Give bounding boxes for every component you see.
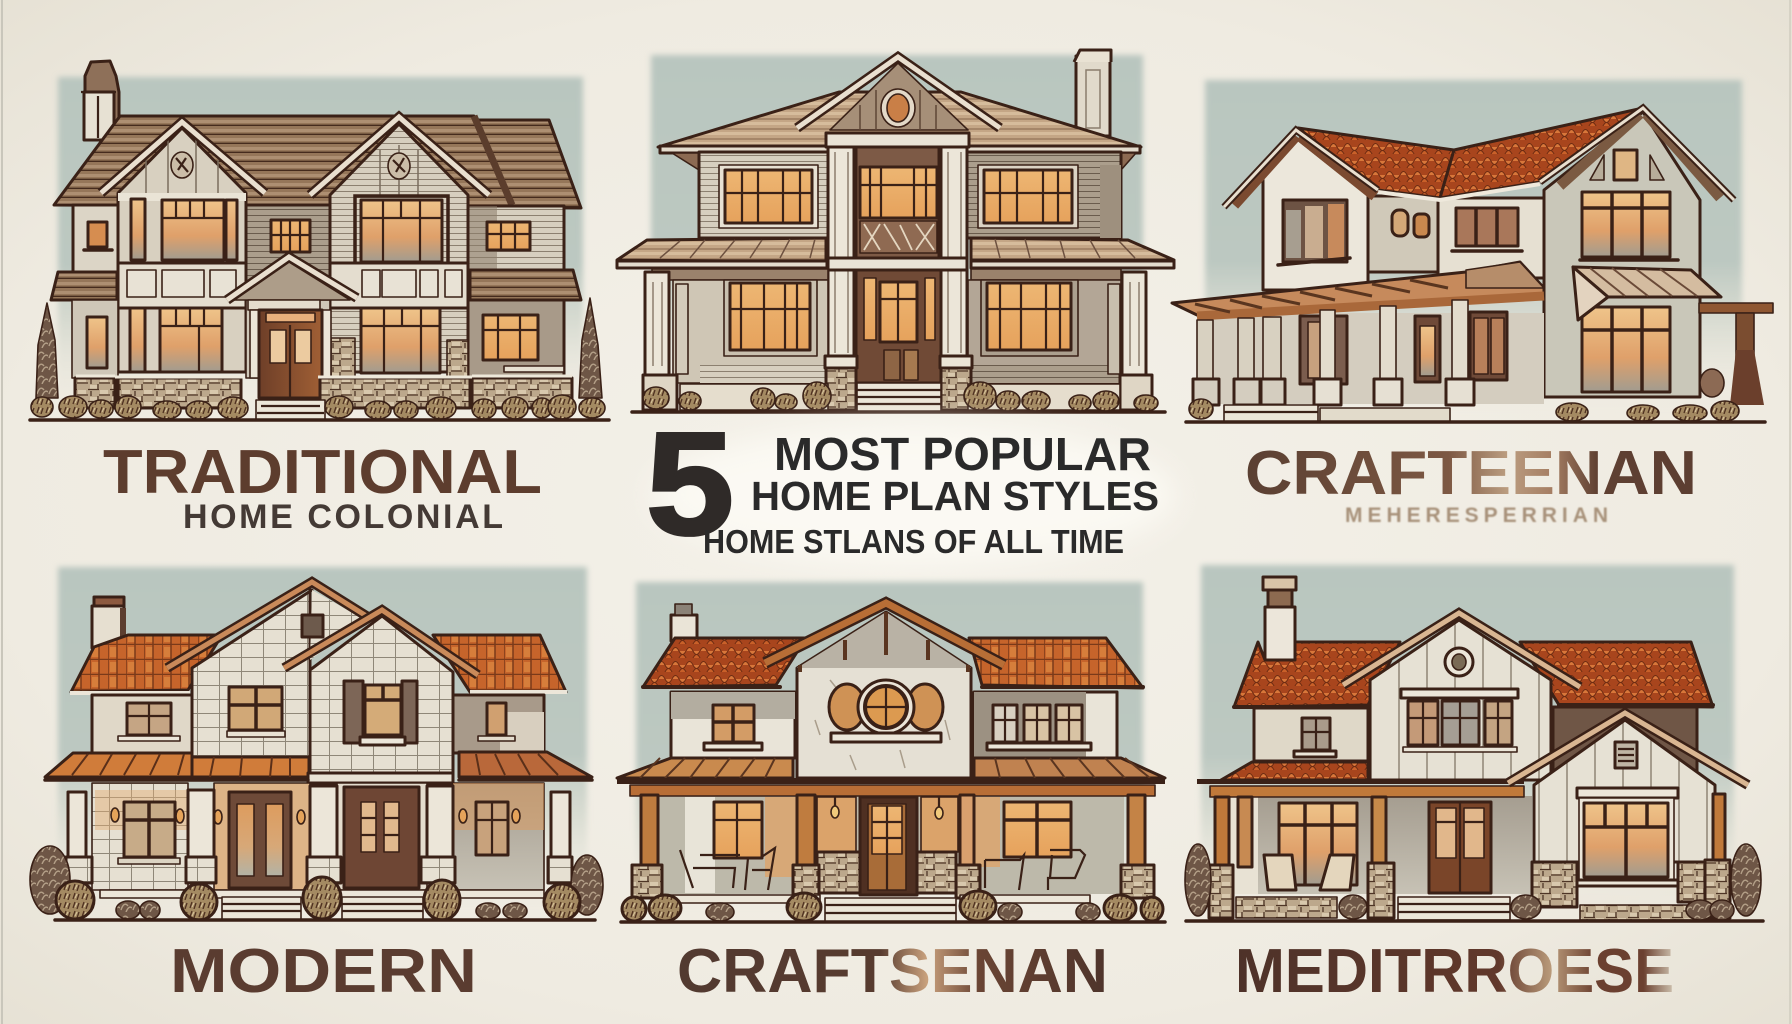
lower windows (87, 308, 538, 380)
chimney (92, 597, 126, 648)
patio chairs (1264, 855, 1354, 890)
centre bay (856, 147, 939, 259)
ground line (1186, 919, 1763, 923)
title halo (655, 425, 1175, 565)
house panel: centre two-storey (617, 50, 1174, 412)
tiled roof (1298, 108, 1643, 200)
title line three: HOME STLANS OF ALL TIME (703, 523, 1124, 560)
porch roofs (617, 238, 1174, 280)
porch posts (643, 272, 1152, 410)
central columns (826, 133, 969, 363)
chimney (1263, 577, 1296, 661)
eave band (660, 146, 1140, 170)
sky wash (1201, 565, 1734, 910)
right gable wall (1544, 112, 1700, 397)
ground floor windows (118, 802, 508, 864)
sky wash (58, 567, 587, 907)
side walls (92, 695, 544, 753)
porch floor (680, 384, 1120, 410)
dark right wall (1553, 707, 1697, 777)
label: traditional: HOME COLONIAL (183, 498, 503, 536)
front door (259, 310, 322, 398)
hip roof (658, 92, 1141, 147)
label: traditional: TRADITIONAL (103, 438, 542, 507)
sky wash (636, 582, 1143, 912)
sky wash (651, 55, 1143, 405)
upper windows (118, 681, 515, 745)
centre white wall (1370, 620, 1551, 780)
side roofs (643, 638, 1143, 688)
porch roof (617, 758, 1165, 796)
mid right wall (1438, 198, 1544, 278)
middle gable block (167, 582, 368, 758)
side roofs (1234, 642, 1713, 707)
entry steps (256, 400, 325, 420)
wing window (1575, 788, 1678, 886)
title line two: HOME PLAN STYLES (751, 473, 1159, 519)
porch roof (1172, 262, 1544, 316)
label: craftsman top: MEHERESPERRIAN (1345, 504, 1608, 527)
title line one: MOST POPULAR (774, 428, 1151, 480)
label: traditional (103, 438, 542, 536)
roof soffits and barge boards (1224, 108, 1734, 207)
column bases (66, 857, 572, 883)
porch interior (658, 795, 1124, 894)
front gable wing (1508, 713, 1748, 862)
ground line (30, 418, 609, 422)
main roof (54, 116, 581, 208)
porch window (1279, 803, 1357, 885)
ground line (632, 410, 1165, 414)
side bushes (30, 846, 603, 915)
cypress trees (36, 298, 602, 398)
round shrubs (56, 877, 580, 920)
shrubs (31, 395, 605, 419)
posts (1209, 794, 1730, 918)
left bay (118, 128, 246, 372)
left wall (1254, 708, 1368, 761)
centre wall (245, 205, 330, 305)
house panel: traditional (30, 61, 609, 420)
bushes (1185, 844, 1761, 920)
porch columns (68, 786, 570, 858)
right gable block (284, 610, 478, 774)
belt panels (118, 263, 468, 308)
double door (1429, 802, 1491, 893)
gable trim (101, 117, 489, 195)
upper windows (704, 705, 1091, 750)
wing stone (1532, 862, 1708, 907)
right lower window (1582, 307, 1670, 392)
right post and cypress (1730, 350, 1764, 405)
lower wall (673, 280, 1121, 383)
porch chairs (680, 848, 1085, 890)
porch interior (1228, 796, 1532, 894)
house panel: top right orange roof (1172, 80, 1773, 422)
shrubs (622, 891, 1163, 921)
upper windows (84, 196, 530, 264)
chimney (1074, 50, 1111, 136)
front door (856, 270, 941, 383)
upper windows (1278, 150, 1678, 265)
ground floor wall (92, 783, 544, 890)
lower walls (72, 300, 564, 378)
label: craftsman bottom: CRAFTSENAN (677, 937, 1108, 1006)
hanging lamps (831, 797, 943, 819)
post bases (1193, 379, 1474, 405)
ground line (55, 918, 595, 922)
upper windows (719, 165, 1078, 228)
left wing wall (73, 205, 119, 275)
porch windows (714, 802, 1071, 858)
centre windows (1401, 689, 1518, 752)
shrubs (1189, 369, 1739, 421)
column bases (825, 356, 972, 410)
posts (632, 795, 1154, 898)
stucco gable wall (797, 612, 971, 778)
awning (1573, 267, 1773, 320)
door and stone (817, 797, 956, 895)
title block (646, 402, 1159, 565)
gable roof (765, 603, 1004, 672)
lower left roof (1221, 762, 1368, 780)
label: mediterranean: MEDITRROESE (1235, 937, 1674, 1006)
lower windows (724, 280, 1078, 356)
side roofs (70, 635, 567, 693)
wall lanterns (111, 808, 520, 824)
house panel: modern (30, 567, 603, 920)
lower wing roofs (51, 270, 581, 300)
porch roof (45, 752, 592, 783)
ground line (1186, 420, 1765, 424)
right wing wall (467, 206, 564, 274)
steps and stone front (1236, 897, 1705, 920)
porch beam (1197, 779, 1524, 797)
entry steps (857, 383, 941, 412)
steps and terrace (660, 895, 1090, 922)
shrubs (643, 382, 1158, 411)
label: craftsman top: CRAFTEENAN (1245, 439, 1697, 508)
porch interior (1197, 312, 1544, 404)
entry porch gable (227, 257, 357, 378)
house panel: mediterranean (1185, 565, 1763, 921)
porch posts (1197, 300, 1754, 383)
chimney (81, 61, 119, 140)
round window (829, 680, 943, 742)
middle wall (1368, 196, 1438, 272)
sky wash (58, 77, 583, 417)
centre gable trim (1343, 613, 1580, 687)
doors (229, 787, 419, 888)
central gable (797, 57, 1000, 130)
sky wash (1205, 80, 1742, 410)
steps (1224, 405, 1450, 422)
side walls (671, 692, 1117, 758)
left block wall (1263, 138, 1368, 290)
porch steps (100, 890, 544, 920)
right bay (330, 124, 468, 372)
upper wall (699, 152, 1121, 238)
label: modern: MODERN (170, 937, 477, 1006)
chimney (671, 604, 697, 641)
ground line (621, 920, 1165, 924)
house panel: craftsman (617, 582, 1165, 922)
big numeral 5: 5 (646, 402, 734, 565)
stone bases (75, 376, 572, 408)
